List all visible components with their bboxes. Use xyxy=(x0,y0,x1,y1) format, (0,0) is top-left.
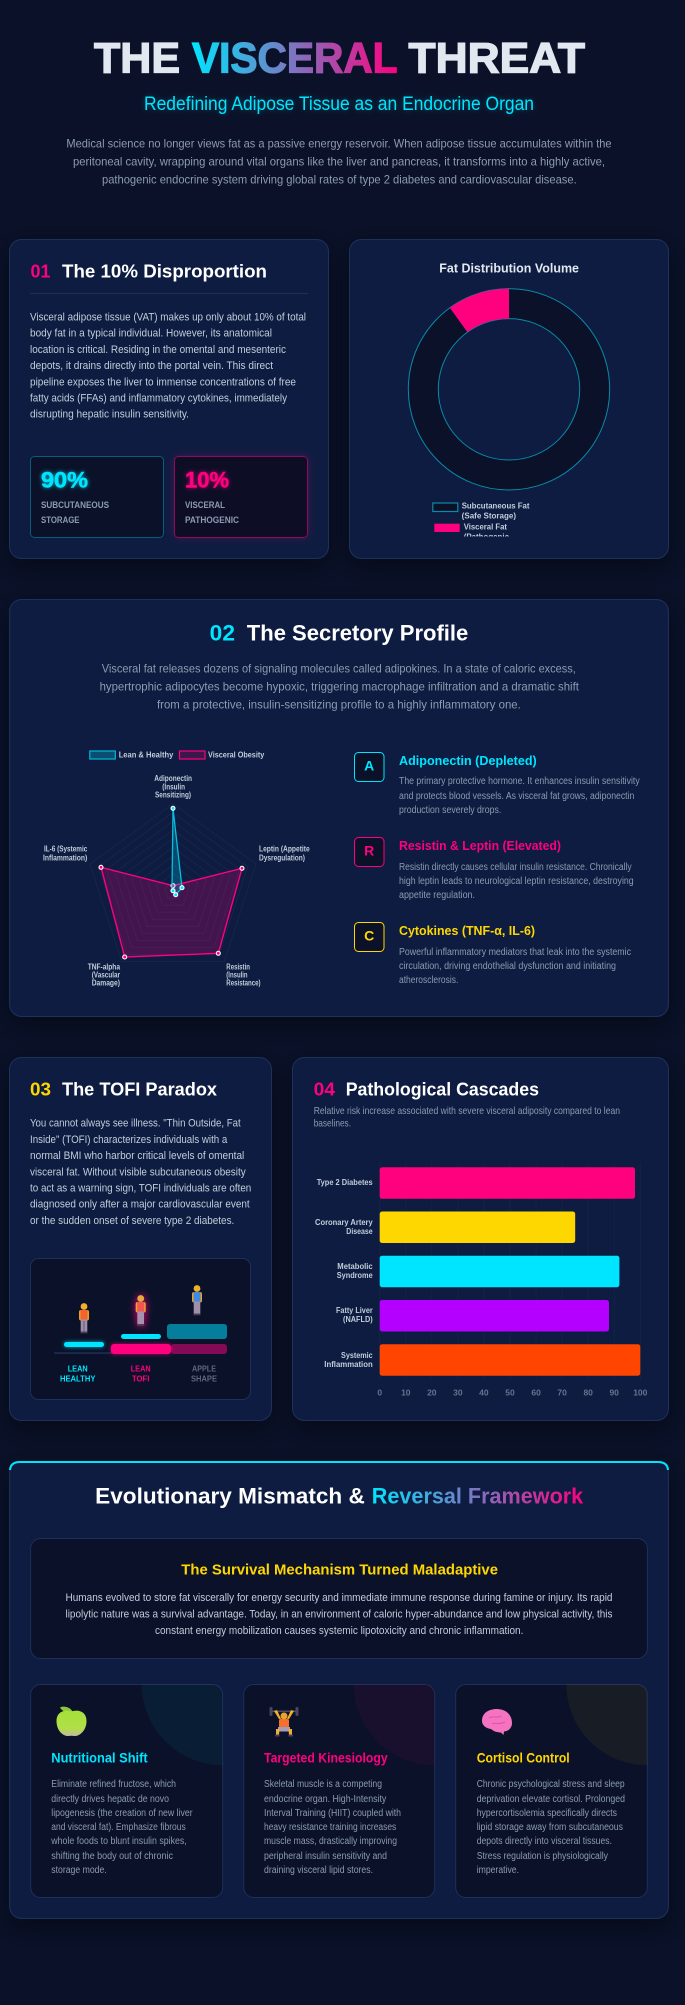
radar axis labels: TNF-alpha xyxy=(88,962,120,971)
donut legend xyxy=(432,502,530,536)
item: adiponectin: Adiponectin (Depleted) xyxy=(399,753,537,768)
bar labels: Systemic xyxy=(341,1351,373,1360)
donut legend: Visceral Fat xyxy=(464,523,507,532)
radar legend xyxy=(90,750,265,759)
axis ticks xyxy=(377,1388,648,1398)
body text: visceral fat. Without visible subcutaneous obesity xyxy=(30,1166,246,1178)
card text: hypercortisolemia specifically directs xyxy=(477,1808,617,1819)
bar labels: Coronary Artery xyxy=(315,1218,373,1227)
card title: Targeted Kinesiology xyxy=(264,1751,388,1766)
title: THE xyxy=(94,35,180,83)
card: targeted kinesiology xyxy=(243,1684,436,1898)
radar legend: Visceral Obesity xyxy=(208,750,265,759)
card text: Eliminate refined fructose, which xyxy=(51,1779,176,1790)
card text: whole foods to blunt insulin spikes, xyxy=(50,1836,187,1847)
figure labels: APPLE xyxy=(192,1364,216,1374)
heading 02: The Secretory Profile xyxy=(247,621,468,646)
bar labels: (NAFLD) xyxy=(343,1315,373,1324)
section intro: from a protective, insulin-sensitizing profile to a highly inflammatory one. xyxy=(157,698,521,712)
icon: green apple xyxy=(56,1707,86,1736)
card title: Nutritional Shift xyxy=(51,1751,148,1766)
card text: lipogenesis (the creation of new liver xyxy=(51,1808,193,1819)
figure: lean healthy xyxy=(64,1303,104,1347)
panel: evolutionary mismatch and reversal framework xyxy=(10,1462,685,1918)
subtitle: Redefining Adipose Tissue as an Endocrine Organ xyxy=(144,94,534,115)
radar axis labels: Resistin xyxy=(226,962,250,971)
item: adiponectin: The primary protective hormone. It enhances insulin sensitivity xyxy=(399,776,640,787)
donut legend: (Safe Storage) xyxy=(462,512,516,521)
bar labels: Syndrome xyxy=(337,1271,373,1280)
callout: survival mechanism: Humans evolved to store fat viscerally for energy security and immediate immune response during famine or injury. Its rapid xyxy=(66,1592,612,1604)
panel: 01 the 10% disproportion xyxy=(10,240,328,558)
card text: muscle mass, drastically improving xyxy=(264,1836,397,1847)
section description: baselines. xyxy=(314,1118,351,1130)
framework heading: Evolutionary Mismatch & xyxy=(95,1483,365,1508)
item: resistin and leptin: appetite regulation. xyxy=(399,890,475,901)
item: resistin and leptin: Resistin & Leptin (Elevated) xyxy=(399,838,561,853)
card text: Chronic psychological stress and sleep xyxy=(477,1779,625,1790)
section description: Relative risk increase associated with severe visceral adiposity compared to lean xyxy=(314,1105,620,1117)
stat: 90% subcutaneous: SUBCUTANEOUS xyxy=(41,500,109,510)
panel: 04 pathological cascades xyxy=(292,1058,668,1420)
panel: 03 the TOFI paradox xyxy=(10,1058,272,1420)
stat: 10% visceral: VISCERAL xyxy=(185,500,225,510)
axis ticks: 40 xyxy=(479,1388,489,1398)
radar axis labels xyxy=(43,774,310,988)
heading 03: 03 xyxy=(30,1079,51,1099)
stat: 90% subcutaneous xyxy=(30,456,164,538)
card text: directly drives hepatic de novo xyxy=(51,1794,169,1805)
intro paragraph: pathogenic endocrine system driving global rates of type 2 diabetes and cardiovascular disease. xyxy=(102,173,577,187)
intro paragraph xyxy=(66,137,612,187)
header xyxy=(66,35,612,187)
section intro xyxy=(100,662,580,712)
body text: location is critical. Residing in the omental and mesenteric xyxy=(30,344,286,356)
series: visceral obesity xyxy=(99,865,244,959)
heading 01: The 10% Disproportion xyxy=(62,262,267,282)
panel: 02 the secretory profile xyxy=(10,600,668,1016)
section intro: Visceral fat releases dozens of signaling molecules called adipokines. In a state of caloric excess, xyxy=(102,662,576,676)
callout: survival mechanism: lipolytic nature was a survival advantage. Today, in an environment of caloric hyper-abundance and low physical activity, this xyxy=(66,1608,613,1620)
radar axis labels: (Insulin xyxy=(162,782,185,791)
stat: 90% subcutaneous: STORAGE xyxy=(41,515,80,525)
axis ticks: 30 xyxy=(453,1388,463,1398)
title: VISCERAL xyxy=(192,35,398,83)
card text: deprivation elevate cortisol. Prolonged xyxy=(477,1794,625,1805)
radar axis labels: Dysregulation) xyxy=(259,854,305,863)
body text: normal BMI who harbor critical levels of omental xyxy=(30,1150,244,1162)
radar chart xyxy=(43,750,310,988)
body text: diagnosed only after a major cardiovascular event xyxy=(30,1199,250,1211)
heading 02: 02 xyxy=(210,621,235,646)
item: resistin and leptin: R xyxy=(364,843,374,859)
card text: peripheral insulin sensitivity and xyxy=(264,1851,387,1862)
radar axis labels: Inflammation) xyxy=(43,854,88,863)
card text: storage mode. xyxy=(51,1865,107,1876)
figure labels: HEALTHY xyxy=(60,1374,96,1384)
card title: Cortisol Control xyxy=(477,1751,570,1766)
card text: depots directly into visceral tissues. xyxy=(477,1836,612,1847)
panel: fat distribution donut xyxy=(350,240,668,558)
body text: Visceral adipose tissue (VAT) makes up only about 10% of total xyxy=(30,312,306,324)
card text xyxy=(50,1779,193,1876)
radar axis labels: Resistance) xyxy=(226,979,261,988)
body text xyxy=(30,312,306,421)
axis ticks: 0 xyxy=(377,1388,382,1398)
donut legend: Subcutaneous Fat xyxy=(462,502,530,511)
body text: You cannot always see illness. "Thin Outside, Fat xyxy=(30,1118,241,1130)
radar axis labels: Sensitizing) xyxy=(155,790,191,799)
TOFI body comparison diagram xyxy=(30,1258,250,1400)
card text: Skeletal muscle is a competing xyxy=(264,1779,382,1790)
stat: 10% visceral: PATHOGENIC xyxy=(185,515,239,525)
icon: brain xyxy=(482,1709,512,1735)
figure labels xyxy=(60,1364,217,1384)
radar legend: Lean & Healthy xyxy=(119,750,174,759)
radar axis labels: (Insulin xyxy=(226,971,248,980)
horizontal bar chart xyxy=(315,1162,648,1398)
item: cytokines: atherosclerosis. xyxy=(399,975,458,986)
donut chart xyxy=(408,289,610,490)
stat: 10% visceral xyxy=(174,456,308,538)
stat: 90% subcutaneous: 90% xyxy=(41,467,88,492)
figure labels: TOFI xyxy=(132,1374,149,1384)
donut legend: (Pathogenic xyxy=(464,533,510,542)
stat: 10% visceral: 10% xyxy=(185,467,229,492)
title: THREAT xyxy=(408,35,585,83)
figure labels: LEAN xyxy=(68,1364,88,1374)
item: cytokines: Cytokines (TNF-α, IL-6) xyxy=(399,923,535,938)
card text: imperative. xyxy=(477,1865,519,1876)
callout: survival mechanism: The Survival Mechanism Turned Maladaptive xyxy=(181,1561,498,1578)
body text: to act as a warning sign, TOFI individuals are often xyxy=(30,1182,251,1194)
intro paragraph: peritoneal cavity, wrapping around vital organs like the liver and pancreas, it transforms into a highly active, xyxy=(73,155,605,169)
figure labels: LEAN xyxy=(131,1364,151,1374)
axis ticks: 80 xyxy=(583,1388,593,1398)
card text xyxy=(477,1779,625,1876)
card: cortisol control xyxy=(455,1684,648,1898)
axis ticks: 50 xyxy=(505,1388,515,1398)
card text: lipid storage away from subcutaneous xyxy=(477,1822,623,1833)
card text: Interval Training (HIIT) coupled with xyxy=(264,1808,401,1819)
item: adiponectin: production severely drops. xyxy=(399,805,501,816)
card: nutritional shift xyxy=(30,1684,224,1898)
item: cytokines xyxy=(354,922,631,986)
item: cytokines: Powerful inflammatory mediators that leak into the systemic xyxy=(399,947,631,958)
bar labels: Fatty Liver xyxy=(336,1306,373,1315)
card text: draining visceral lipid stores. xyxy=(264,1865,373,1876)
radar axis labels: IL-6 (Systemic xyxy=(44,845,88,854)
item: adiponectin: A xyxy=(364,758,374,774)
axis ticks: 100 xyxy=(633,1388,648,1398)
item: cytokines: C xyxy=(364,928,374,944)
card text: endocrine organ. High-Intensity xyxy=(264,1794,386,1805)
body text: fatty acids (FFAs) and inflammatory cytokines, immediately xyxy=(30,392,287,404)
body text: or the sudden onset of severe type 2 diabetes. xyxy=(30,1215,234,1227)
figure labels: SHAPE xyxy=(191,1374,217,1384)
chart title: Fat Distribution Volume xyxy=(439,262,579,276)
body text: disrupting hepatic insulin sensitivity. xyxy=(30,409,189,421)
axis ticks: 10 xyxy=(401,1388,411,1398)
body text: Inside" (TOFI) characterizes individuals with a xyxy=(30,1134,228,1146)
series: lean and healthy xyxy=(171,806,184,897)
framework heading: Reversal Framework xyxy=(372,1483,584,1508)
bar labels: Metabolic xyxy=(337,1262,373,1271)
radar axis labels: (Vascular xyxy=(92,971,120,980)
body text xyxy=(30,1118,251,1227)
card text xyxy=(264,1779,401,1876)
figure: lean TOFI xyxy=(111,1295,227,1354)
callout: survival mechanism: constant energy mobilization causes systemic lipotoxicity and chronic inflammation. xyxy=(155,1625,523,1637)
bar labels: Type 2 Diabetes xyxy=(317,1178,373,1187)
bar labels xyxy=(315,1178,373,1369)
item: adiponectin xyxy=(354,752,640,816)
item: resistin and leptin: high leptin leads to neurological leptin resistance, destroying xyxy=(399,876,634,887)
figure: apple shape xyxy=(167,1285,227,1339)
card text: Stress regulation is physiologically xyxy=(477,1851,608,1862)
bar labels: Inflammation xyxy=(324,1360,373,1369)
axis ticks: 60 xyxy=(531,1388,541,1398)
intro paragraph: Medical science no longer views fat as a passive energy reservoir. When adipose tissue accumulates within the xyxy=(66,137,612,151)
heading 03: The TOFI Paradox xyxy=(62,1079,217,1099)
card text: and visceral fat). Emphasize fibrous xyxy=(51,1822,186,1833)
body text: pipeline exposes the liver to immense concentrations of free xyxy=(30,376,296,388)
icon: weightlifter xyxy=(270,1707,298,1736)
section description xyxy=(314,1105,620,1130)
heading 04: Pathological Cascades xyxy=(346,1079,539,1099)
heading 01: 01 xyxy=(30,262,50,282)
radar axis labels: Damage) xyxy=(92,979,120,988)
body text: body fat in a typical individual. However, its anatomical xyxy=(30,328,272,340)
item: resistin and leptin xyxy=(354,838,634,901)
axis ticks: 90 xyxy=(609,1388,619,1398)
section intro: hypertrophic adipocytes become hypoxic, triggering macrophage infiltration and a dramatic shift xyxy=(100,680,580,694)
item: adiponectin: and protects blood vessels. As visceral fat grows, adiponectin xyxy=(399,791,634,802)
heading 04: 04 xyxy=(314,1079,335,1099)
radar axis labels: Leptin (Appetite xyxy=(259,845,310,854)
callout: survival mechanism xyxy=(31,1538,647,1658)
item: cytokines: circulation, driving endothelial dysfunction and initiating xyxy=(399,961,616,972)
axis ticks: 20 xyxy=(427,1388,437,1398)
body text: depots, it drains directly into the portal vein. This direct xyxy=(30,360,274,372)
card text: heavy resistance training increases xyxy=(264,1822,396,1833)
axis ticks: 70 xyxy=(557,1388,567,1398)
item: resistin and leptin: Resistin directly causes cellular insulin resistance. Chronically xyxy=(399,862,632,873)
card text: shifting the body out of chronic xyxy=(51,1851,173,1862)
radar axis labels: Adiponectin xyxy=(154,774,192,783)
bar labels: Disease xyxy=(346,1227,373,1236)
